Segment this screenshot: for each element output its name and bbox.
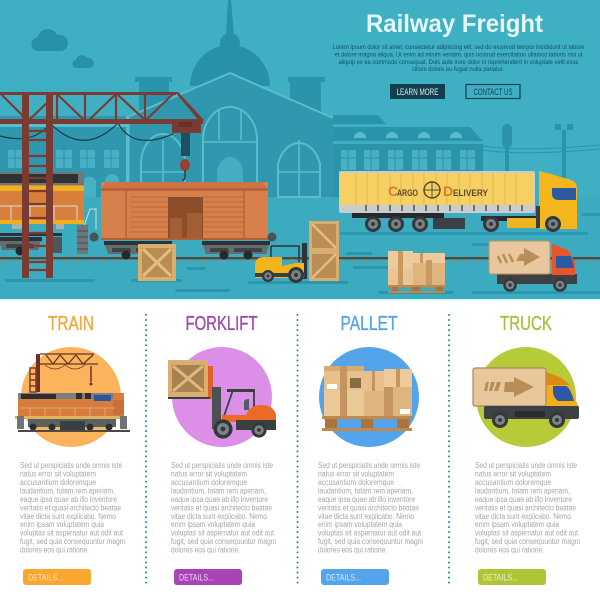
description text: pallet: voluptas sit aspernatur aut odit aut — [318, 529, 422, 538]
description text: forklift: dolores eos qui ratione. — [171, 546, 240, 555]
delivery truck — [489, 241, 577, 292]
icon: clouds — [31, 29, 94, 68]
button: truck details — [478, 569, 546, 585]
button: contact us: CONTACT US — [474, 87, 512, 98]
description text: truck: veritatis et quasi architecto beatae — [475, 503, 576, 512]
description text: forklift — [171, 461, 276, 555]
description text: train: laudantium, totam rem aperiam, — [20, 486, 115, 495]
description text: truck: accusantium doloremque — [475, 478, 551, 487]
description text: truck: laudantium, totam rem aperiam, — [475, 486, 570, 495]
button: forklift details: DETAILS... — [179, 572, 214, 584]
description text: truck: fugit, sed quia consequuntur magni — [475, 537, 580, 546]
panel: hero scene — [0, 0, 600, 301]
label: Cargo Delivery: D — [443, 183, 453, 199]
locomotive — [0, 172, 98, 256]
description text: forklift: veritatis et quasi architecto beatae — [171, 503, 272, 512]
description text: pallet: eaque ipsa quae ab illo inventore — [318, 495, 415, 504]
button: contact us — [466, 84, 520, 98]
button: learn more — [390, 84, 445, 99]
icon: forklift in purple circle — [168, 347, 276, 447]
label: Cargo Delivery: ARGO — [397, 188, 418, 198]
button: train details — [23, 569, 91, 585]
forklift — [255, 243, 307, 283]
description text: truck: dolores eos qui ratione. — [475, 546, 544, 555]
button: pallet details — [321, 569, 389, 585]
icon: train in orange circle — [15, 347, 130, 447]
description text: train: vitae dicta sunt explicabo. Nemo — [20, 512, 116, 521]
title: Railway Freight — [366, 10, 544, 38]
label: Cargo Delivery — [388, 182, 488, 199]
description text: forklift: laudantium, totam rem aperiam, — [171, 486, 266, 495]
description text: forklift: fugit, sed quia consequuntur magni — [171, 537, 276, 546]
description text: truck: natus error sit voluptatem — [475, 470, 551, 478]
description text: truck: Sed ut perspiciatis unde omnis iste — [475, 461, 577, 470]
intro paragraph — [332, 44, 585, 73]
description text: pallet: Sed ut perspiciatis unde omnis iste — [318, 461, 420, 470]
button: pallet details: DETAILS... — [326, 572, 361, 584]
icon: truck in green circle — [473, 347, 579, 447]
description text: forklift: natus error sit voluptatem — [171, 470, 247, 478]
description text: forklift: eaque ipsa quae ab illo inventore — [171, 495, 268, 504]
gantry crane — [0, 92, 204, 278]
description text: pallet — [318, 461, 423, 555]
description text: forklift: Sed ut perspiciatis unde omnis iste — [171, 461, 273, 470]
description text: pallet: fugit, sed quia consequuntur magni — [318, 537, 423, 546]
stacked cargo boxes on pallet — [388, 251, 445, 293]
boxcar — [90, 182, 276, 260]
description text: forklift: vitae dicta sunt explicabo. Nemo — [171, 512, 267, 521]
semi truck: Cargo Delivery — [339, 171, 577, 232]
description text: pallet: vitae dicta sunt explicabo. Nemo — [318, 512, 414, 521]
button: truck details: DETAILS... — [483, 572, 518, 584]
heading: forklift: FORKLIFT — [186, 313, 258, 335]
icon: pallet in blue circle — [319, 347, 419, 447]
description text: truck: eaque ipsa quae ab illo inventore — [475, 495, 572, 504]
label: Cargo Delivery: C — [388, 183, 398, 199]
description text: train: Sed ut perspiciatis unde omnis iste — [20, 461, 122, 470]
label: Cargo Delivery: ELIVERY — [453, 188, 488, 198]
railway track — [0, 257, 600, 260]
stacked crates — [309, 221, 339, 281]
description text: train — [20, 461, 125, 555]
description text: truck: voluptas sit aspernatur aut odit aut — [475, 529, 579, 538]
description text: pallet: dolores eos qui ratione. — [318, 546, 387, 555]
wooden crate — [138, 244, 176, 281]
description text: train: voluptas sit aspernatur aut odit aut — [20, 529, 124, 538]
station building silhouette — [0, 0, 600, 198]
button: forklift details — [174, 569, 242, 585]
panel: forklift — [168, 313, 276, 585]
ground shadows — [5, 213, 600, 294]
description text: forklift: enim ipsam voluptatem quia — [171, 520, 255, 529]
description text: truck: enim ipsam voluptatem quia — [475, 520, 559, 529]
heading: train: TRAIN — [48, 313, 94, 335]
description text: truck — [475, 461, 580, 555]
heading: truck: TRUCK — [500, 313, 552, 335]
description text: train: dolores eos qui ratione. — [20, 546, 89, 555]
description text: pallet: natus error sit voluptatem — [318, 470, 394, 478]
description text: train: natus error sit voluptatem — [20, 470, 96, 478]
crane hook — [180, 124, 190, 180]
description text: pallet: veritatis et quasi architecto beatae — [318, 503, 419, 512]
description text: truck: vitae dicta sunt explicabo. Nemo — [475, 512, 571, 521]
description text: train: fugit, sed quia consequuntur magni — [20, 537, 125, 546]
button: learn more: LEARN MORE — [396, 87, 438, 98]
description text: forklift: accusantium doloremque — [171, 478, 247, 487]
description text: pallet: laudantium, totam rem aperiam, — [318, 486, 413, 495]
dotted dividers — [146, 315, 449, 586]
panel: pallet — [318, 313, 423, 585]
intro paragraph: cillum dolore eu fugiat nulla pariatur. — [412, 66, 504, 73]
description text: train: enim ipsam voluptatem quia — [20, 520, 104, 529]
heading: pallet: PALLET — [340, 313, 398, 335]
description text: train: accusantium doloremque — [20, 478, 96, 487]
panel: truck — [473, 313, 580, 585]
description text: train: veritatis et quasi architecto beatae — [20, 503, 121, 512]
button: train details: DETAILS... — [28, 572, 63, 584]
description text: pallet: enim ipsam voluptatem quia — [318, 520, 402, 529]
description text: pallet: accusantium doloremque — [318, 478, 394, 487]
description text: train: eaque ipsa quae ab illo inventore — [20, 495, 117, 504]
description text: forklift: voluptas sit aspernatur aut odit aut — [171, 529, 275, 538]
panel: train — [15, 313, 130, 585]
